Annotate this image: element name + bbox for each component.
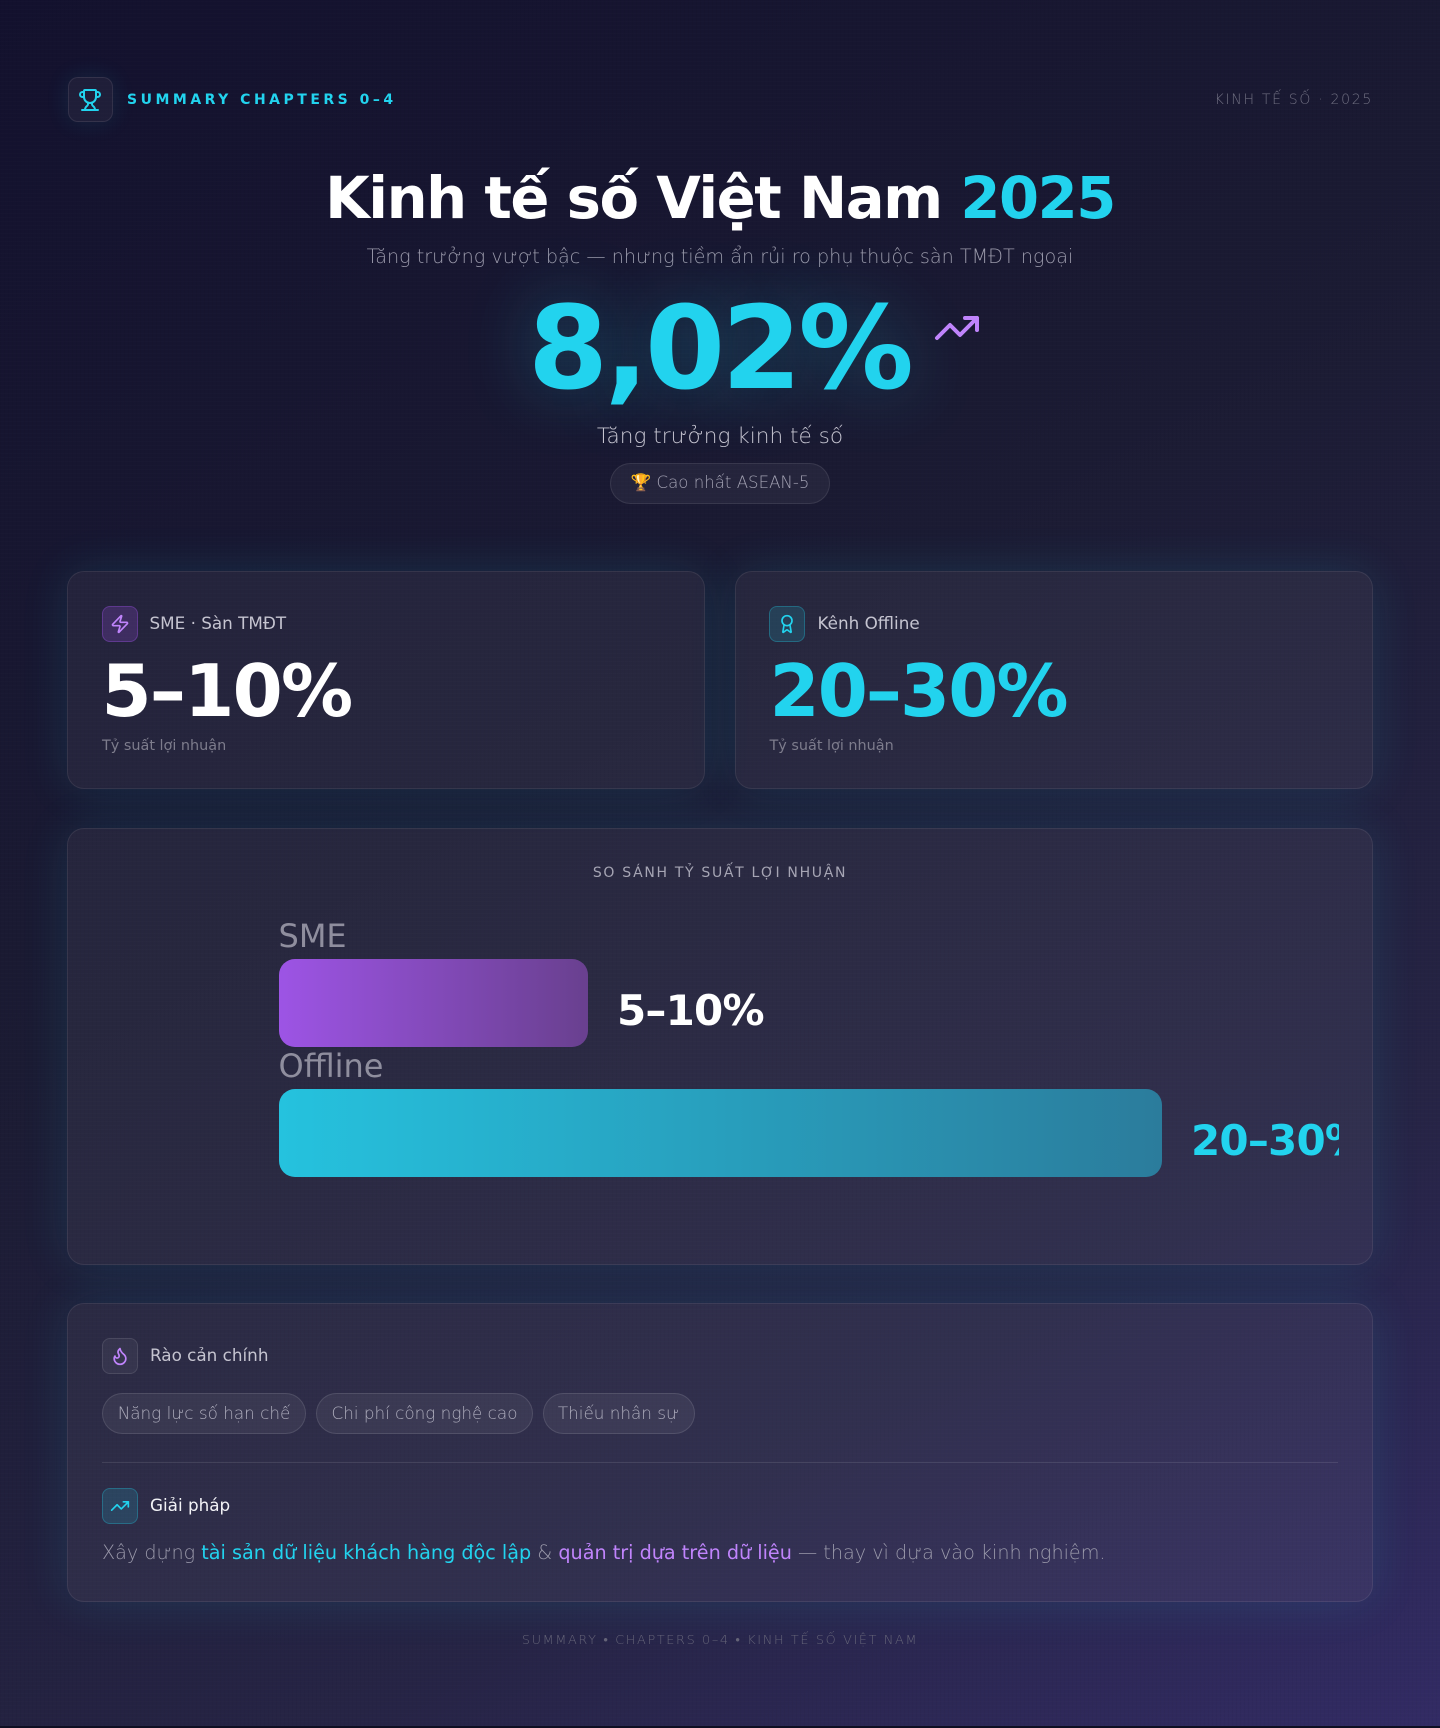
icon: trending up bbox=[934, 316, 980, 340]
chip: Chi phí công nghệ cao bbox=[332, 1402, 517, 1422]
chip: Thiếu nhân sự bbox=[558, 1402, 679, 1422]
hero number: 8,02% bbox=[528, 282, 910, 416]
value: 5–10% bbox=[102, 649, 351, 733]
icon: flame bbox=[102, 1338, 138, 1374]
caption: Tỷ suất lợi nhuận bbox=[102, 738, 226, 754]
bar: Offline bbox=[278, 1088, 1162, 1176]
badge: 🏆 Cao nhất ASEAN-5 bbox=[631, 473, 809, 492]
header icon: trophy bbox=[68, 77, 112, 122]
chip bbox=[542, 1392, 694, 1434]
header right label: KINH TẾ SỐ · 2025 bbox=[1215, 92, 1373, 108]
chart title: SO SÁNH TỶ SUẤT LỢI NHUẬN bbox=[593, 865, 847, 881]
panel: Offline stat bbox=[735, 571, 1373, 789]
caption: Tỷ suất lợi nhuận bbox=[770, 738, 894, 754]
subtitle: Tăng trưởng vượt bậc — nhưng tiềm ẩn rủi ro phụ thuộc sàn TMĐT ngoại bbox=[367, 245, 1073, 268]
label: SME · Sàn TMĐT bbox=[150, 613, 286, 633]
bar: SME bbox=[278, 958, 588, 1046]
hero caption: Tăng trưởng kinh tế số bbox=[597, 424, 843, 449]
label: Offline: Offline bbox=[278, 1047, 383, 1085]
bar chart bbox=[278, 917, 1339, 1177]
icon: zap bbox=[102, 606, 138, 642]
footer: SUMMARY • CHAPTERS 0–4 • KINH TẾ SỐ VIỆT NAM bbox=[522, 1633, 918, 1648]
heading: solution: Giải pháp bbox=[150, 1494, 230, 1514]
chip bbox=[102, 1392, 306, 1434]
value: SME: 5–10% bbox=[617, 986, 764, 1035]
panel: SME stat bbox=[67, 571, 705, 789]
panel: comparison chart bbox=[67, 828, 1373, 1265]
solution text: Xây dựng tài sản dữ liệu khách hàng độc lập & quản trị dựa trên dữ liệu — thay vì dựa vào kinh nghiệm. bbox=[102, 1541, 1106, 1564]
label: Kênh Offline bbox=[818, 613, 920, 633]
label: SME: SME bbox=[278, 917, 347, 955]
title: Kinh tế số Việt Nam 2025 bbox=[325, 165, 1115, 232]
badge bbox=[610, 463, 830, 504]
chip: Năng lực số hạn chế bbox=[118, 1402, 290, 1422]
header label: SUMMARY CHAPTERS 0–4 bbox=[127, 92, 397, 108]
chip bbox=[316, 1392, 533, 1434]
heading: barriers: Rào cản chính bbox=[150, 1344, 268, 1364]
icon: award bbox=[769, 606, 805, 642]
value: 20–30% bbox=[770, 649, 1067, 733]
panel: barriers and solution bbox=[67, 1303, 1373, 1602]
icon: trending up bbox=[102, 1488, 138, 1524]
